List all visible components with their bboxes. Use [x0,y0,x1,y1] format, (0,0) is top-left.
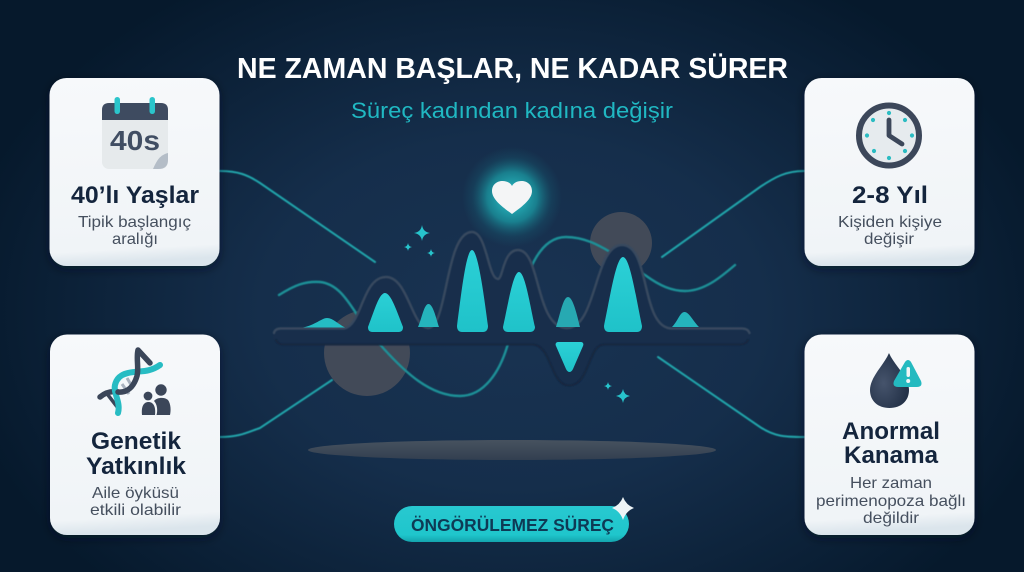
bar underside shadow [276,340,748,386]
description: aralığı [112,231,158,248]
heart with glow [462,147,562,247]
wave body [273,232,750,385]
heading: Anormal [842,418,940,445]
card: Anormal Kanama [804,334,974,535]
description [838,214,942,248]
card: Genetik Yatkınlık [50,334,220,535]
description: Tipik başlangıç [78,214,191,231]
icon: drop with warning [870,353,922,408]
subtitle: Süreç kadından kadına değişir [351,98,673,123]
heading: 2-8 Yıl [852,182,928,209]
teal peaks [303,250,699,372]
sparkles [404,225,630,403]
badge: Öngörülemez Süreç [394,497,634,542]
teal wave curve [279,237,735,396]
description: etkili olabilir [90,502,182,519]
description [816,475,966,527]
waveform chart [273,232,750,386]
heading: Kanama [844,442,939,469]
description [78,214,191,248]
description: perimenopoza bağlı [816,493,966,510]
badge: Öngörülemez Süreç: ÖNGÖRÜLEMEZ SÜREÇ [411,515,614,535]
wave ridge [274,232,750,333]
heading: 40’lı Yaşlar [71,182,199,209]
icon: sparkle [612,497,634,520]
heading [842,418,940,469]
heading: Yatkınlık [86,453,187,480]
icon: DNA and people [100,350,171,415]
description: Aile öyküsü [92,485,179,502]
connector lines [220,171,804,437]
card: 2-8 Yıl [804,78,974,266]
icon: calendar [102,97,168,169]
heading [86,428,187,480]
icon: clock [859,106,919,166]
description [90,485,182,519]
description: değildir [863,510,920,527]
description: Her zaman [850,475,932,492]
icon: calendar: 40s [110,125,160,156]
title: NE ZAMAN BAŞLAR, NE KADAR SÜRER [237,52,788,85]
floating platform [308,440,716,460]
description: Kişiden kişiye [838,214,942,231]
decorative circles [324,212,652,396]
heading: Genetik [91,428,182,455]
description: değişir [864,231,915,248]
card: 40'lı Yaşlar [50,78,220,266]
